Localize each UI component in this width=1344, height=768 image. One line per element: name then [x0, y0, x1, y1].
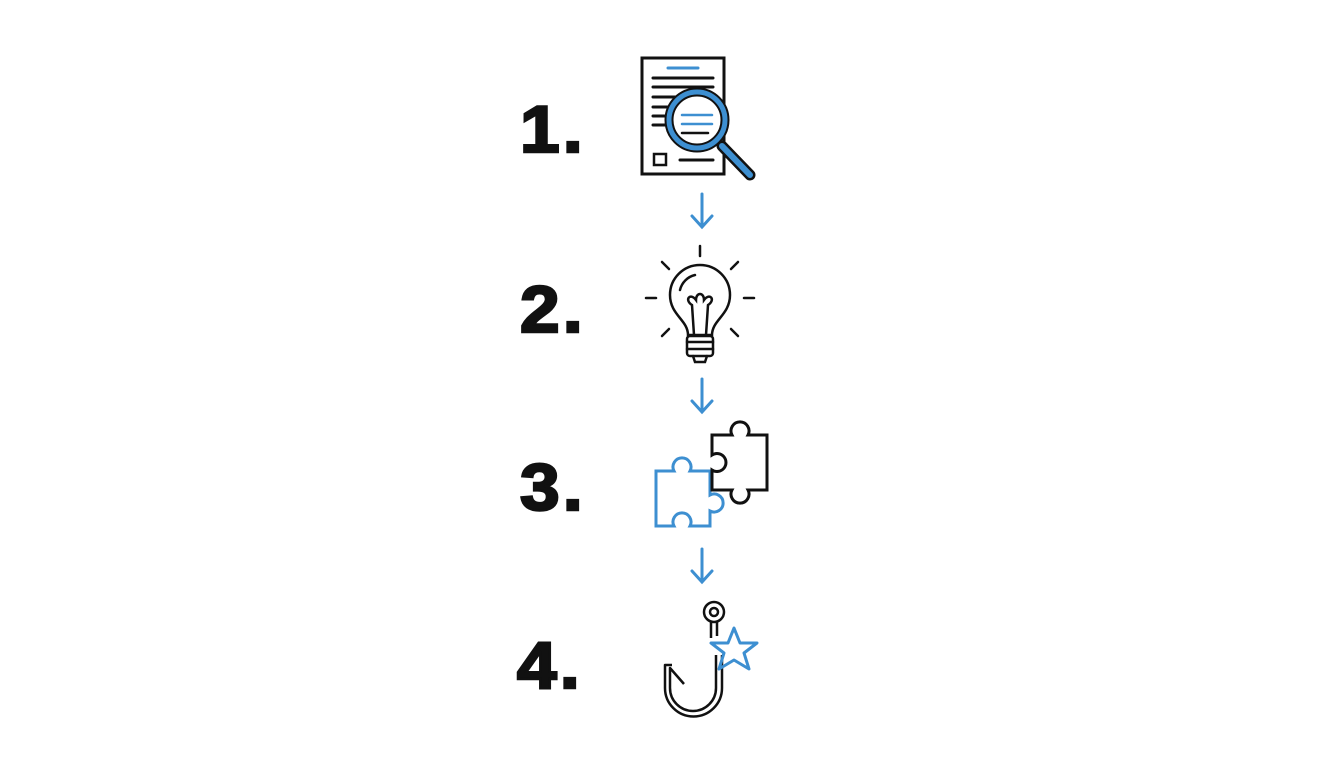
step 2 number: 2.: [520, 272, 586, 346]
step 1 number: 1.: [520, 92, 586, 166]
arrow 3: [692, 549, 712, 582]
icon: document with magnifier: [642, 58, 750, 175]
arrow 1: [692, 194, 712, 227]
step 3 number: 3.: [520, 450, 586, 524]
icon: hook with star: [665, 602, 757, 716]
icon: light bulb: [646, 246, 754, 362]
arrow 2: [692, 379, 712, 412]
step 4 number: 4.: [517, 628, 583, 702]
icon: puzzle pieces: [656, 422, 767, 526]
